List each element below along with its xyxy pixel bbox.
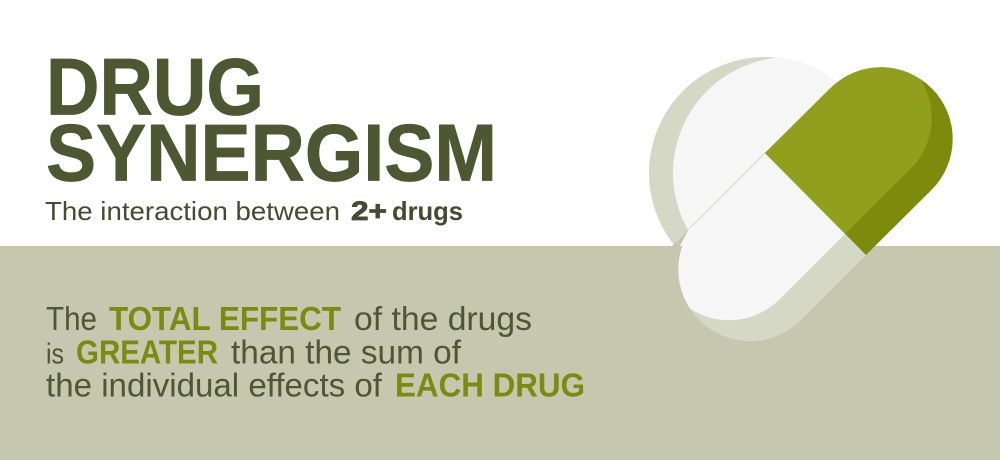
line 1 [46,300,532,337]
subtitle: 2+ [351,196,387,226]
line 3: the individual effects of [46,366,383,404]
line 1: TOTAL EFFECT [109,300,341,337]
line 2 [46,334,462,370]
subtitle [45,196,463,226]
subtitle: The interaction between [45,196,340,226]
description text [46,300,585,404]
line 1: The [46,300,97,337]
background: olive lower band [0,246,1000,460]
subtitle: drugs [392,196,463,226]
icon: heart-shaped pills [649,46,960,350]
line 2: is [46,338,64,370]
title: SYNERGISM [46,108,497,198]
back pill: round tablet [649,57,836,244]
shaded notch below tablet [672,229,689,246]
title: DRUG [46,42,264,132]
line 1: of the drugs [354,300,532,337]
line 2: than the sum of [231,334,462,370]
line 3 [46,366,585,404]
title [46,42,497,198]
capsule: white half [678,154,866,341]
line 2: GREATER [76,334,218,370]
line 3: EACH DRUG [395,366,585,404]
capsule: green half [765,67,953,255]
seam between tablet and capsule [688,153,765,230]
background: white top band [0,0,1000,246]
